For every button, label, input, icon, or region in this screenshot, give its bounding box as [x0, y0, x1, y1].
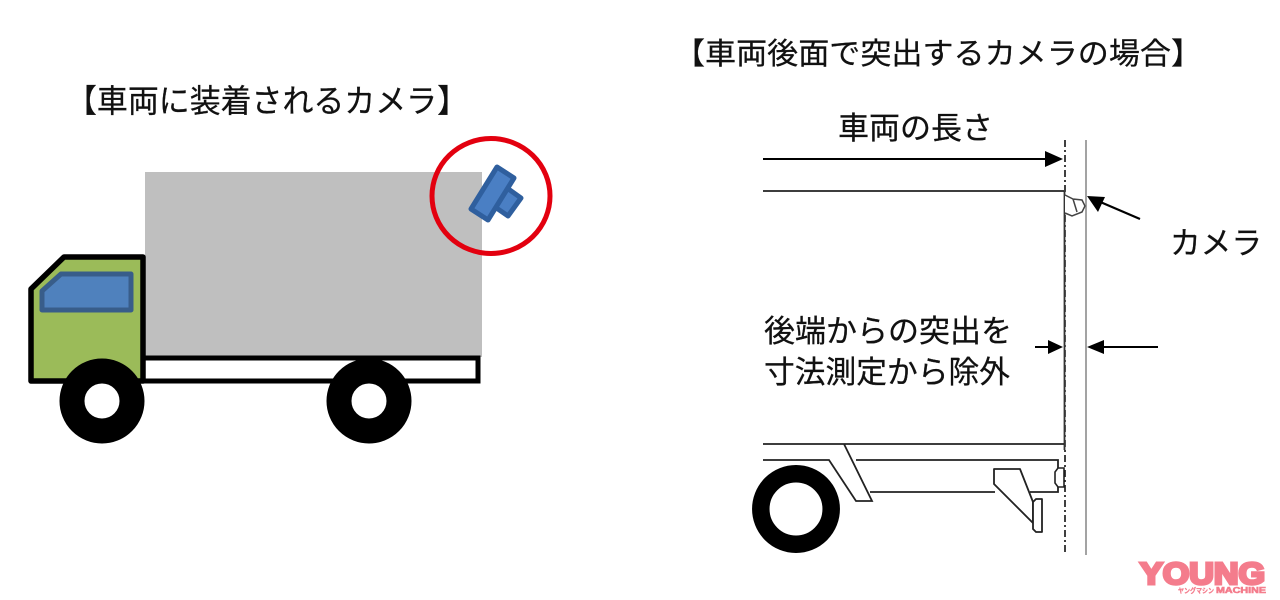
- watermark logo: YOUNG: [1140, 556, 1265, 591]
- protrusion exclusion label: 寸法測定から除外: [764, 355, 1010, 390]
- arrow: dimension right: [1087, 340, 1158, 354]
- rear bumper guard: [994, 469, 1033, 523]
- rear wheel: [761, 474, 831, 544]
- rear camera: [1065, 195, 1085, 216]
- cab: [31, 257, 143, 381]
- front wheel: [72, 371, 132, 431]
- camera label: カメラ: [1170, 226, 1262, 261]
- watermark logo: MACHINE: [1216, 585, 1266, 595]
- rear wheel: [339, 371, 399, 431]
- icon: camera small part: [495, 188, 521, 216]
- tail lamp: [1055, 468, 1064, 487]
- red circle: [432, 138, 550, 254]
- vehicle rear wall: [1064, 191, 1066, 450]
- cab window: [42, 274, 131, 310]
- right heading: 【車両後面で突出するカメラの場合】: [674, 38, 1202, 71]
- rear diagram: [761, 140, 1086, 555]
- vehicle body outline: [763, 191, 1064, 501]
- left heading: 【車両に装着されるカメラ】: [66, 83, 468, 119]
- vehicle length limit line: [1064, 140, 1066, 555]
- truck bed: [141, 358, 478, 381]
- protrusion exclusion label: 後端からの突出を: [764, 314, 1012, 349]
- camera highlight callout: [432, 138, 550, 254]
- bumper guard plate: [1033, 499, 1042, 532]
- truck illustration: [31, 172, 482, 431]
- watermark logo: ヤングマシン: [1178, 586, 1214, 595]
- arrow: vehicle length: [763, 151, 1063, 167]
- camera protrusion limit line: [1085, 140, 1087, 555]
- cargo box: [145, 172, 482, 357]
- icon: camera body: [471, 167, 514, 220]
- arrow: camera pointer: [1087, 196, 1140, 219]
- arrow: dimension left: [1035, 340, 1063, 354]
- length label: 車両の長さ: [838, 111, 993, 146]
